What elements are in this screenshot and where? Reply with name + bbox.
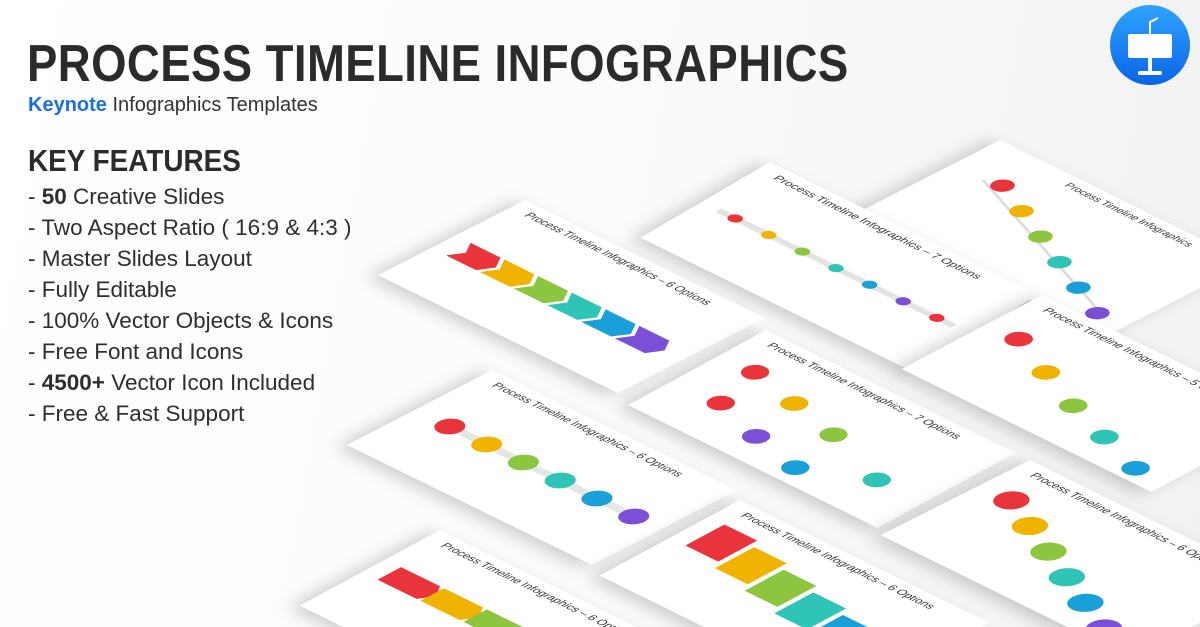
title: PROCESS TIMELINE INFOGRAPHICS	[27, 35, 849, 93]
slide: top center: Process Timeline Infographics – 7 Options	[770, 174, 984, 281]
slide: top center	[640, 162, 1039, 370]
feature list: - Master Slides Layout	[28, 246, 252, 271]
slide: middle center: Process Timeline Infographics – 7 Options	[764, 342, 964, 441]
slide: middle center	[628, 330, 1016, 528]
slide: left top	[378, 200, 765, 393]
slide: left middle: Process Timeline Infographics – 6 Options	[488, 382, 686, 479]
icon: keynote logo	[1110, 5, 1190, 85]
slide: bottom center: Process Timeline Infographics – 6 Options	[737, 512, 938, 611]
slide: top right partial: Process Timeline Infographics	[1061, 182, 1196, 249]
subtitle: Keynote Infographics Templates	[28, 94, 318, 116]
feature list: - Free Font and Icons	[28, 339, 243, 364]
slide: left middle	[347, 370, 737, 565]
slide: bottom left	[300, 530, 690, 627]
slide: top right partial	[855, 140, 1200, 337]
feature list: - 50 Creative Slides	[28, 184, 224, 209]
feature list: - Fully Editable	[28, 277, 177, 302]
slide: bottom center	[600, 500, 990, 627]
slide: left top: Process Timeline Infographics – 6 Options	[521, 211, 715, 307]
feature list: - 100% Vector Objects & Icons	[28, 308, 333, 333]
feature list	[28, 184, 352, 426]
feature list: - 4500+ Vector Icon Included	[28, 370, 315, 395]
feature list: - Free & Fast Support	[28, 401, 244, 426]
feature list: - Two Aspect Ratio ( 16:9 & 4:3 )	[28, 215, 352, 240]
heading: key features: KEY FEATURES	[28, 143, 241, 178]
slide: middle right	[902, 295, 1200, 492]
slide: bottom right	[881, 460, 1200, 627]
